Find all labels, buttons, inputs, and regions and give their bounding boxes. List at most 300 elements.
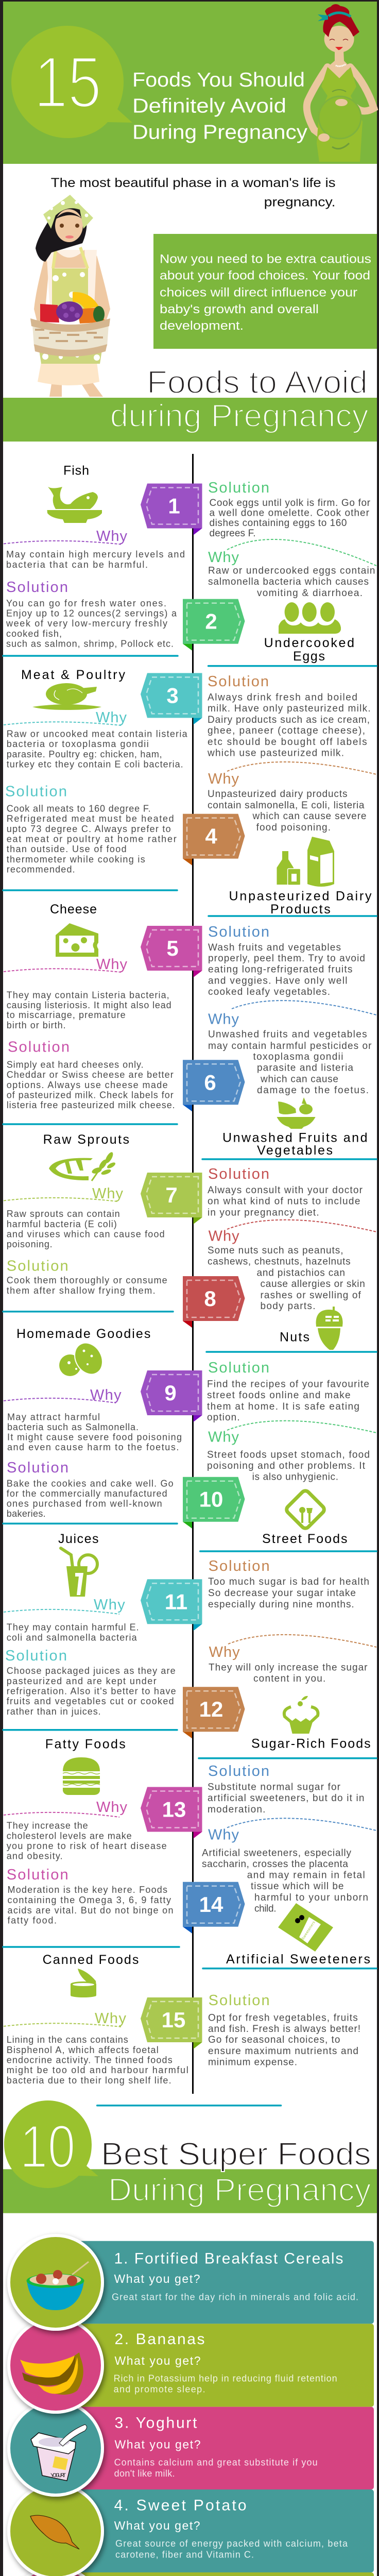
- why text: and pistachios can: [256, 1267, 345, 1279]
- solution text: [7, 1666, 176, 1717]
- solution text: Enjoy up to 12 ounces(2 servings) a: [6, 608, 177, 619]
- solution text: Opt for fresh vegetables, fruits: [208, 2012, 358, 2024]
- panel: fatty foods: [4, 1737, 173, 1926]
- solution text: which use pasteurized milk.: [207, 748, 344, 759]
- number badge 4: 4: [205, 824, 217, 849]
- solution text: Too much sugar is bad for health: [208, 1577, 369, 1587]
- icon: cheese wedge: [56, 923, 98, 957]
- card 2: bananas: What you get?: [114, 2354, 201, 2367]
- solution text: Refrigerated meat must be heated: [7, 814, 174, 824]
- card 4: sweet potato: [56, 2489, 374, 2572]
- why text: [6, 549, 185, 570]
- solution text: [6, 598, 177, 649]
- solution text: Cook eggs until yolk is firm. Go for: [209, 498, 371, 509]
- solution text: [208, 2012, 360, 2068]
- why text: content in you.: [253, 1673, 325, 1684]
- illustration: pregnant woman: [307, 4, 374, 162]
- why text: [7, 990, 171, 1030]
- heading: cheese: Cheese: [50, 902, 97, 917]
- why label: Why: [208, 549, 239, 566]
- why text: Raw or undercooked eggs contain: [208, 566, 375, 576]
- number badge 5: [141, 926, 202, 977]
- solution text: listeria free pasteurized milk cheese.: [7, 1100, 175, 1110]
- heading: homemade goodies: Homemade Goodies: [16, 1327, 150, 1341]
- solution text: So decrease your sugar intake: [208, 1588, 356, 1599]
- why label: Why: [96, 1799, 128, 1816]
- solution text: artificial sweeteners, but do it in: [208, 1793, 364, 1804]
- panel: artificial sweeteners: [202, 1763, 376, 1967]
- section dividers: [3, 656, 376, 2106]
- solution text: dishes containing eggs to 160: [209, 518, 347, 529]
- why text: cashews, chestnuts, hazelnuts: [208, 1257, 351, 1267]
- why text: to miscarriage, premature: [7, 1010, 126, 1020]
- why text: might be too old and harbour harmful: [7, 2065, 188, 2075]
- number badge 1: 1: [168, 494, 180, 518]
- solution text: [208, 1782, 364, 1815]
- card 3: yoghurt: Contains calcium and great substitute if you: [114, 2458, 318, 2468]
- solution text: than outside. Use of food: [7, 844, 127, 854]
- speech bubble with 15: 15: [34, 41, 101, 123]
- solution text: them after shallow frying them.: [7, 1285, 156, 1296]
- solution text: on what kind of nuts to include: [208, 1196, 360, 1207]
- card 1: fortified breakfast cereals: Great start for the day rich in minerals and folic acid.: [112, 2292, 358, 2302]
- why text: and may remain in fetal: [247, 1870, 365, 1881]
- card 3: yoghurt: don't like milk.: [114, 2468, 175, 2479]
- card 1: fortified breakfast cereals: 1. Fortified Breakfast Cereals: [114, 2250, 343, 2267]
- heading: unpasteurized dairy products: Unpasteurized Dairy: [229, 889, 372, 904]
- food circle 1: cereal bowl: [7, 2234, 104, 2331]
- solution text: ghee, paneer (cottage cheese),: [208, 725, 365, 736]
- why text: may contain harmful pesticides or: [208, 1041, 372, 1052]
- solution text: upto 73 degree C. Always prefer to: [7, 824, 171, 834]
- speech bubble with 10: [4, 2100, 98, 2188]
- number badge 4: [183, 814, 245, 866]
- solution text: cooked leafy vegetables.: [208, 987, 330, 997]
- heading: canned foods: Canned Foods: [43, 1953, 139, 1967]
- card 4: sweet potato: carotene, fiber and Vitamin C.: [115, 2550, 254, 2560]
- solution text: street foods online and make: [207, 1390, 351, 1401]
- why text: [7, 728, 188, 770]
- number badge 6: 6: [204, 1070, 216, 1094]
- solution text: Always drink fresh and boiled: [208, 692, 357, 703]
- number badge 9: 9: [164, 1381, 177, 1405]
- why text: bacteria due to their long shelf life.: [7, 2075, 171, 2086]
- solution label: Solution: [208, 924, 269, 940]
- solution text: etc should be bought off labels: [208, 737, 367, 748]
- why text: child.: [254, 1903, 276, 1914]
- why label: Why: [209, 1644, 240, 1660]
- solution text: [208, 1185, 363, 1218]
- number badge 9: [141, 1370, 202, 1422]
- why label: Why: [90, 1387, 122, 1403]
- main title: Foods You Should: [132, 69, 305, 91]
- solution text: Wash fruits and vegetables: [208, 942, 341, 953]
- solution text: minimum expense.: [208, 2057, 297, 2068]
- why text: poisoning.: [7, 1239, 53, 1249]
- solution text: them at home. It is safe eating: [207, 1401, 359, 1412]
- heading: unwashed fruits and vegetables: Unwashed Fruits and: [222, 1131, 368, 1145]
- heading: raw sprouts: Raw Sprouts: [43, 1132, 129, 1147]
- solution text: of pasteurized milk. Check labels for: [7, 1090, 174, 1100]
- icon: burger: [63, 1757, 100, 1795]
- solution text: and veggies. Have only well: [208, 976, 347, 986]
- why text: bacteria or toxoplasma gondii: [7, 739, 149, 749]
- heading: sugar-rich foods: Sugar-Rich Foods: [251, 1737, 371, 1751]
- why text: May attract harmful: [7, 1412, 100, 1422]
- section title: foods to avoid: during Pregnancy: [110, 398, 369, 434]
- panel: raw sprouts: [4, 1132, 167, 1296]
- panel: homemade goodies: [4, 1327, 182, 1519]
- solution text: rather than in juices.: [7, 1706, 101, 1717]
- solution label: Solution: [208, 1360, 269, 1376]
- solution text: Choose packaged juices as they are: [7, 1666, 176, 1676]
- solution text: [7, 1478, 174, 1519]
- number badge 12: [183, 1687, 245, 1738]
- why text: They increase the: [7, 1821, 88, 1831]
- card 3: yoghurt: What you get?: [114, 2437, 201, 2451]
- card 3: yoghurt: [56, 2407, 374, 2489]
- why label: Why: [209, 1228, 239, 1245]
- number badge 11: 11: [165, 1589, 187, 1614]
- solution label: Solution: [208, 673, 269, 690]
- number badge 15: 15: [162, 2008, 185, 2032]
- number badge 6: [183, 1060, 245, 1111]
- card 2: bananas: Rich in Potassium help in reducing fluid retention: [114, 2374, 337, 2384]
- why text: poisoning and other problems. It: [207, 1461, 366, 1471]
- solution text: fatty food.: [7, 1916, 57, 1926]
- why text: is also unhygienic.: [252, 1471, 338, 1483]
- solution text: in your pregnancy diet.: [208, 1208, 319, 1218]
- panel: sugar-rich foods: [208, 1558, 376, 1751]
- header banner: [3, 2, 377, 164]
- number badge 5: 5: [166, 936, 179, 960]
- why label: Why: [96, 528, 128, 545]
- why text: toxoplasma gondii: [253, 1052, 343, 1062]
- intro statement: [51, 176, 336, 209]
- solution text: options. Always use cheese made: [7, 1080, 168, 1090]
- solution text: week of very low-mercury freshly: [6, 618, 167, 629]
- why text: Artificial sweeteners, especially: [202, 1848, 351, 1858]
- green message box: about your food choices. Your food: [160, 269, 370, 283]
- heading: street foods: Street Foods: [262, 1532, 347, 1546]
- panel: street foods: [207, 1360, 376, 1546]
- why label: Why: [208, 1011, 239, 1028]
- why text: Raw sprouts can contain: [7, 1209, 120, 1219]
- solution text: [208, 1577, 369, 1610]
- why label: Why: [208, 1429, 239, 1445]
- heading: undercooked eggs: Undercooked: [264, 636, 354, 650]
- illustration: woman with fruit basket: [30, 195, 110, 397]
- speech bubble with 15: [11, 26, 132, 138]
- section title: best super foods: During Pregnancy: [108, 2173, 371, 2208]
- green message box: choices will direct influence your: [160, 286, 357, 300]
- icon: fruit bowl: [277, 1097, 316, 1129]
- panel: undercooked eggs: [208, 480, 376, 664]
- solution text: option.: [207, 1412, 240, 1423]
- solution label: Solution: [208, 1166, 269, 1182]
- number badge 12: 12: [199, 1697, 223, 1721]
- solution text: properly, peel them. Try to avoid: [208, 953, 365, 964]
- card 3: yoghurt: 3. Yoghurt: [114, 2415, 197, 2432]
- why text: Unpasteurized dairy products: [208, 789, 347, 800]
- icon: cupcake: [284, 1696, 318, 1732]
- solution text: refrigeration. Also it's better to have: [7, 1686, 176, 1696]
- main title: During Pregnancy: [132, 122, 308, 143]
- why text: It might cause severe food poisoning: [7, 1432, 182, 1443]
- solution label: Solution: [7, 1258, 68, 1275]
- solution text: [207, 692, 371, 759]
- solution text: pasteurized and are kept under: [7, 1676, 157, 1686]
- food circle 2: bananas: [7, 2317, 104, 2414]
- icon: street food sign: [285, 1489, 326, 1530]
- why text: parasite. Poultry eg: chicken, ham,: [7, 749, 162, 759]
- solution text: [208, 942, 365, 997]
- icon: eggs: [279, 602, 341, 634]
- why text: saccharin, crosses the placenta: [202, 1859, 348, 1870]
- solution text: Cheddar or Swiss cheese are better: [7, 1070, 174, 1080]
- solution label: Solution: [8, 1039, 70, 1056]
- solution text: Cook them thoroughly or consume: [7, 1275, 167, 1285]
- solution text: [7, 1885, 173, 1926]
- heading: unwashed fruits and vegetables: [222, 1131, 368, 1158]
- why label: Why: [95, 2010, 127, 2027]
- solution text: especially during nine months.: [208, 1599, 354, 1610]
- why text: bacteria such as Salmonella.: [7, 1422, 139, 1432]
- green message box: Now you need to be extra cautious: [160, 252, 371, 266]
- solution text: containing the Omega 3, 6, 9 fatty: [7, 1895, 171, 1905]
- icon: fish on plate: [47, 487, 102, 523]
- section title: foods to avoid: [3, 365, 377, 442]
- card 2: bananas: 2. Bananas: [114, 2331, 205, 2348]
- card 5: tofu: [56, 2572, 374, 2576]
- why text: harmful to your unborn: [254, 1892, 368, 1903]
- panel: fish: [4, 464, 185, 649]
- why text: [7, 1209, 165, 1249]
- solution text: Cook all meats to 160 degree F.: [7, 804, 151, 814]
- solution label: Solution: [6, 579, 68, 596]
- why text: Lining in the cans contains: [7, 2035, 128, 2045]
- card 1: fortified breakfast cereals: What you get?: [114, 2272, 200, 2285]
- why text: [202, 1848, 368, 1914]
- solution text: Go for seasonal choices, to: [208, 2035, 340, 2045]
- solution text: cooked fish,: [6, 629, 62, 639]
- why text: They may contain Listeria bacteria,: [7, 990, 169, 1001]
- panel: canned foods: [4, 1953, 360, 2086]
- number badge 10: 10: [199, 1487, 223, 1512]
- green message box: baby's growth and overall: [160, 302, 319, 316]
- card 2: bananas: [56, 2324, 374, 2407]
- number badge 7: 7: [165, 1183, 178, 1207]
- number badge 8: 8: [204, 1286, 216, 1311]
- heading: fish: Fish: [63, 464, 89, 478]
- solution text: recommended.: [7, 865, 75, 875]
- number badge 2: [183, 599, 245, 651]
- why text: parasite and listeria: [257, 1063, 353, 1074]
- icon: roast chicken: [32, 683, 101, 710]
- panel: unwashed fruits and vegetables: [208, 924, 376, 1158]
- solution text: eat meat or poultry at home rather: [7, 834, 177, 844]
- icon: opened can: [71, 1969, 96, 1997]
- food circle 4: sweet potato: [7, 2483, 104, 2576]
- panel: nuts: [208, 1166, 376, 1350]
- section title: best super foods: [3, 2100, 377, 2213]
- number badge 3: 3: [166, 683, 179, 707]
- why label: Why: [208, 1827, 239, 1843]
- why text: cholesterol levels are make: [7, 1831, 132, 1841]
- why text: [208, 1029, 372, 1096]
- solution text: [7, 1275, 167, 1296]
- solution text: acids are vital. But do not binge on: [7, 1905, 173, 1916]
- solution text: eating long-refrigerated fruits: [208, 964, 352, 975]
- why text: birth or birth.: [7, 1020, 66, 1030]
- why text: [208, 566, 375, 599]
- why text: turkey etc they contain E coli bacteria.: [7, 759, 183, 770]
- why text: [209, 1663, 368, 1684]
- solution label: Solution: [5, 1648, 67, 1664]
- why text: Unwashed fruits and vegetables: [208, 1029, 367, 1040]
- solution text: [209, 498, 371, 539]
- why text: rashes or swelling of: [261, 1290, 361, 1301]
- icon: sweetener packet: Sweeteners: [301, 1921, 316, 1941]
- section title: foods to avoid: Foods to Avoid: [147, 365, 368, 400]
- solution text: milk. Have only pasteurized milk.: [208, 703, 371, 714]
- number badge 14: 14: [199, 1892, 223, 1917]
- solution text: Dairy products such as ice cream,: [208, 715, 370, 725]
- why label: Why: [96, 709, 127, 726]
- why text: coli and salmonella bacteria: [7, 1632, 137, 1642]
- why text: and obesity.: [7, 1851, 63, 1861]
- number badge 13: [141, 1787, 202, 1838]
- solution text: bakeries.: [7, 1509, 46, 1519]
- why text: and even cause harm to the foetus.: [7, 1442, 179, 1452]
- number badge 13: 13: [162, 1797, 186, 1822]
- heading: undercooked eggs: [264, 636, 354, 664]
- main title: Definitely Avoid: [132, 95, 286, 117]
- why label: Why: [208, 771, 239, 787]
- why text: Some nuts such as peanuts,: [208, 1245, 343, 1256]
- card 4: sweet potato: 4. Sweet Potato: [114, 2497, 247, 2514]
- number badge 3: [141, 673, 202, 724]
- solution text: and fish. Fresh is always better!: [208, 2024, 360, 2035]
- why text: [208, 1245, 365, 1312]
- heading: unwashed fruits and vegetables: Vegetables: [257, 1143, 333, 1158]
- why text: Bisphenol A, which affects foetal: [7, 2045, 159, 2055]
- food circle 3: yoghurt: YOGURT: [50, 2472, 66, 2479]
- why text: body parts.: [261, 1301, 315, 1312]
- heading: unpasteurized dairy products: Products: [270, 902, 331, 917]
- icon: juice glass: [61, 1548, 97, 1597]
- solution text: moderation.: [208, 1804, 265, 1815]
- solution text: Moderation is the key here. Foods: [7, 1885, 167, 1895]
- why text: harmful bacteria (E coli): [7, 1219, 117, 1229]
- card 4: sweet potato: What you get?: [114, 2519, 200, 2532]
- solution text: thermometer while cooking is: [7, 854, 145, 865]
- main title: [132, 69, 308, 143]
- why text: [7, 2035, 188, 2086]
- heading: unpasteurized dairy products: [229, 889, 372, 917]
- icon: acorn: [316, 1307, 343, 1350]
- why text: contain salmonella, E coli, listeria: [208, 800, 365, 811]
- card 1: fortified breakfast cereals: [56, 2241, 374, 2324]
- why text: May contain high mercury levels and: [6, 549, 185, 560]
- solution text: Always consult with your doctor: [208, 1185, 363, 1196]
- solution text: [207, 1379, 369, 1423]
- why text: causing listeriosis. It might also lead: [7, 1000, 171, 1010]
- why label: Why: [96, 956, 128, 973]
- intro statement: The most beautiful phase in a woman's life is: [51, 176, 336, 190]
- solution text: such as salmon, shrimp, Pollock etc.: [6, 639, 174, 649]
- heading: juices: Juices: [58, 1532, 99, 1546]
- green message box: development.: [160, 319, 244, 333]
- solution label: Solution: [7, 1460, 68, 1476]
- why text: vomiting & diarrhoea.: [257, 588, 363, 599]
- why text: which can cause severe: [252, 811, 367, 822]
- panel: juices: [4, 1532, 176, 1717]
- heading: meat and poultry: Meat & Poultry: [21, 668, 126, 682]
- speech bubble with 10: 10: [20, 2113, 75, 2181]
- number badge 14: [183, 1882, 245, 1934]
- icon: sweetener packet: [278, 1903, 333, 1952]
- why text: bacteria that can be harmful.: [6, 560, 148, 570]
- why text: They may contain harmful E.: [7, 1622, 139, 1632]
- why text: salmonella bacteria which causes: [208, 577, 369, 587]
- why text: They will only increase the sugar: [209, 1663, 368, 1673]
- number badge 1: [141, 483, 202, 535]
- why text: [7, 1622, 139, 1642]
- why label: Why: [92, 1185, 124, 1202]
- section title: best super foods: Best Super Foods: [101, 2137, 371, 2172]
- why text: food poisoning.: [256, 822, 331, 833]
- panel: unpasteurized dairy: [207, 673, 376, 917]
- why text: [208, 789, 367, 833]
- panel: meat and poultry: [4, 668, 188, 875]
- number badge 8: [183, 1276, 245, 1328]
- solution label: Solution: [7, 1867, 68, 1883]
- why text: damage to the foetus.: [257, 1085, 369, 1096]
- icon: cookies: [59, 1338, 108, 1379]
- solution label: Solution: [5, 784, 67, 800]
- heading: fatty foods: Fatty Foods: [45, 1737, 126, 1752]
- intro statement: pregnancy.: [264, 195, 336, 209]
- number badge 7: [141, 1173, 202, 1224]
- solution text: ones purchased from well-known: [7, 1499, 162, 1509]
- why text: you prone to risk of heart disease: [7, 1841, 167, 1851]
- green message box: [153, 234, 377, 349]
- why text: and viruses which can cause food: [7, 1229, 165, 1240]
- why text: cause allergies or skin: [261, 1279, 365, 1290]
- why text: [7, 1821, 167, 1861]
- solution label: Solution: [209, 1558, 270, 1574]
- panel: cheese: [4, 902, 175, 1110]
- timeline spine: [192, 454, 194, 2094]
- solution label: Solution: [208, 1763, 269, 1780]
- why text: [207, 1450, 370, 1483]
- solution text: ensure maximum nutrients and: [208, 2046, 358, 2057]
- icon: milk bottle and carton: [277, 837, 334, 887]
- solution text: for the commercially manufactured: [7, 1488, 167, 1499]
- right column: solution: [208, 1992, 360, 2068]
- solution text: Simply eat hard cheeses only.: [7, 1059, 144, 1070]
- solution label: Solution: [208, 480, 269, 496]
- solution text: Substitute normal sugar for: [208, 1782, 341, 1793]
- number badge 11: [141, 1579, 202, 1631]
- solution text: degrees F.: [209, 528, 255, 539]
- why text: tissue which will be: [251, 1881, 344, 1892]
- solution text: [7, 1059, 175, 1110]
- heading: undercooked eggs: Eggs: [293, 649, 325, 664]
- solution text: Bake the cookies and cake well. Go: [7, 1478, 174, 1488]
- food circle 3: yoghurt: [7, 2400, 104, 2497]
